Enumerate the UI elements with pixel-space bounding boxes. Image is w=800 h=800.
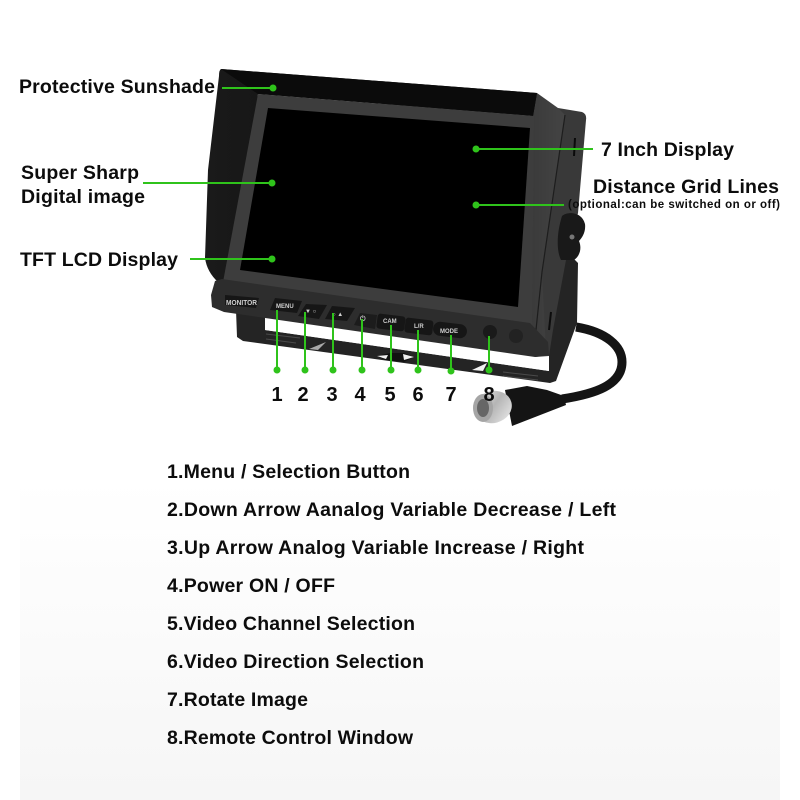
- connector plug: [471, 386, 566, 427]
- front buttons: MODE: [440, 329, 458, 335]
- label: distance grid lines: [568, 176, 780, 211]
- front buttons: ⏻: [360, 315, 366, 323]
- label: distance grid lines: (optional:can be switched on or off): [568, 199, 780, 211]
- button function list: 4.Power ON / OFF: [167, 575, 335, 597]
- button function list: 1.Menu / Selection Button: [167, 461, 410, 483]
- button numbers: 8: [483, 384, 495, 406]
- monitor label: [225, 295, 259, 308]
- button function list: 3.Up Arrow Analog Variable Increase / Right: [167, 537, 584, 559]
- cable: [562, 327, 622, 399]
- front buttons: CAM: [383, 319, 397, 325]
- button function list: [167, 461, 616, 749]
- label: super sharp digital image: Super Sharp: [21, 162, 139, 184]
- label: TFT LCD display: TFT LCD Display: [20, 249, 178, 271]
- button numbers: 6: [412, 384, 424, 406]
- front buttons: ○ ▲: [332, 312, 343, 318]
- button numbers: 2: [297, 384, 309, 406]
- label: super sharp digital image: [21, 162, 145, 208]
- button numbers: 4: [354, 384, 366, 406]
- button function list: 8.Remote Control Window: [167, 727, 414, 749]
- screen: [240, 108, 530, 307]
- label: distance grid lines: Distance Grid Lines: [593, 176, 779, 198]
- callout lines: buttons: [274, 310, 492, 374]
- monitor label: MONITOR: [226, 298, 258, 307]
- front buttons: MENU: [276, 304, 294, 310]
- button function list: 5.Video Channel Selection: [167, 613, 415, 635]
- button numbers: 1: [271, 384, 283, 406]
- front buttons: [270, 298, 523, 343]
- adjustment knob: [558, 213, 585, 260]
- label: super sharp digital image: Digital image: [21, 186, 145, 208]
- front buttons: ▼ ○: [305, 309, 317, 315]
- callout lines: upper labels: [143, 84, 593, 262]
- label: 7 inch display: 7 Inch Display: [601, 139, 734, 161]
- protective sunshade: [205, 69, 537, 282]
- monitor rear housing: [525, 108, 586, 357]
- front buttons: L/R: [414, 324, 424, 330]
- button function list: 2.Down Arrow Aanalog Variable Decrease / Left: [167, 499, 616, 521]
- button function list: 6.Video Direction Selection: [167, 651, 424, 673]
- mounting bracket: [236, 259, 578, 383]
- button numbers: [271, 384, 495, 406]
- side panel: [530, 93, 565, 352]
- button function list: 7.Rotate Image: [167, 689, 308, 711]
- button numbers: 5: [384, 384, 396, 406]
- label: protective sunshade: Protective Sunshade: [19, 76, 215, 98]
- front frame: [223, 94, 534, 325]
- monitor product image: [205, 69, 622, 427]
- button numbers: 7: [445, 384, 457, 406]
- button numbers: 3: [326, 384, 338, 406]
- lower button bar: [211, 279, 549, 357]
